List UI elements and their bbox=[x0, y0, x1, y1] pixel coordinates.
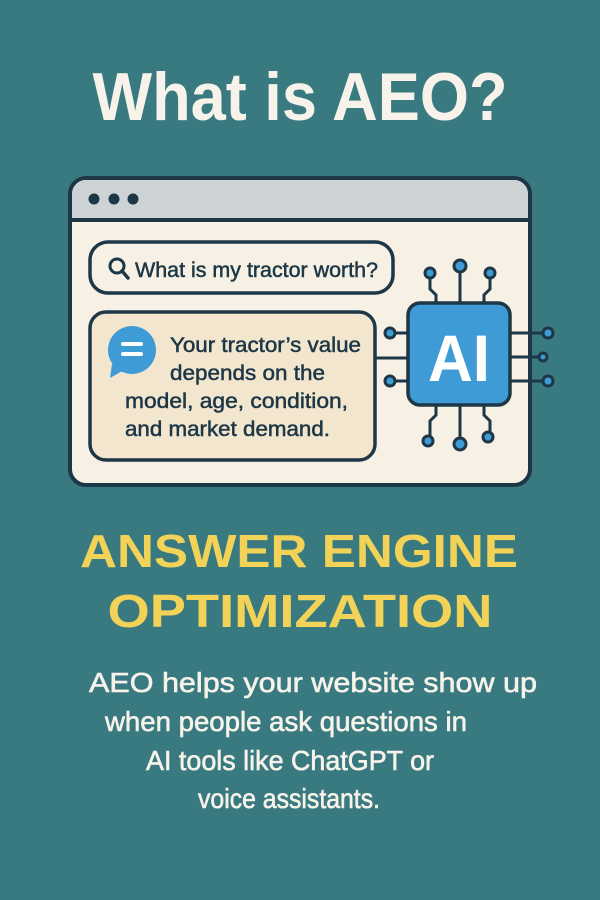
body text: voice assistants. bbox=[198, 783, 380, 814]
body text: when people ask questions in bbox=[104, 706, 467, 737]
body text: AEO helps your website show up bbox=[89, 667, 537, 698]
body text: AI tools like ChatGPT or bbox=[146, 745, 434, 776]
heading: answer engine optimization: ANSWER ENGINE bbox=[80, 525, 518, 577]
search box bbox=[90, 242, 393, 293]
heading: answer engine optimization bbox=[80, 525, 518, 637]
answer box: Your tractor’s value bbox=[170, 334, 361, 357]
panel: browser window bbox=[70, 178, 553, 485]
answer box: and market demand. bbox=[125, 418, 330, 441]
answer box bbox=[90, 312, 375, 460]
heading: answer engine optimization: OPTIMIZATION bbox=[108, 585, 492, 637]
icon: AI chip bbox=[375, 260, 553, 450]
answer box: depends on the bbox=[170, 362, 325, 385]
search box: What is my tractor worth? bbox=[135, 259, 378, 282]
icon: window dots bbox=[88, 194, 138, 204]
answer box: model, age, condition, bbox=[125, 390, 348, 413]
body text bbox=[89, 667, 537, 814]
icon: AI chip: AI bbox=[428, 321, 490, 395]
title: What is AEO? bbox=[92, 59, 508, 135]
icon: chat bubble bbox=[108, 326, 156, 378]
